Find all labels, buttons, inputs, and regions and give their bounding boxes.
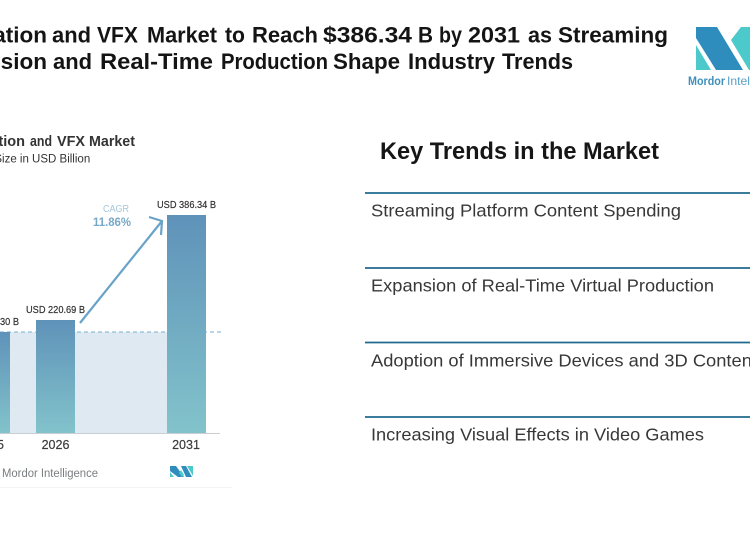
title: $386.34: [323, 22, 412, 48]
title: B: [418, 22, 433, 48]
title: by: [439, 22, 462, 48]
title: Reach: [252, 22, 318, 48]
bar value labels: [0, 199, 216, 328]
logo: Mordor Intelligence: Intel: [727, 74, 750, 88]
chart heading: and: [30, 134, 52, 150]
CAGR label: CAGR: [103, 204, 129, 215]
title: Trends: [502, 49, 573, 74]
trend 1: Streaming Platform Content Spending: [371, 200, 681, 220]
trend 4: Increasing Visual Effects in Video Games: [371, 424, 704, 444]
bar value labels: USD 386.34 B: [157, 199, 216, 211]
title: and: [52, 22, 91, 48]
heading: key trends: Key Trends in the Market: [380, 138, 659, 165]
year labels: 2026: [42, 438, 69, 452]
bar value labels: USD 220.69 B: [26, 304, 85, 316]
axis: [0, 432, 220, 434]
title: Streaming: [558, 22, 668, 48]
bar 2026: [36, 320, 75, 433]
small logo: [170, 466, 193, 477]
panel: market size chart: [0, 134, 232, 488]
title: Production: [221, 49, 328, 74]
chart heading: VFX: [57, 134, 85, 150]
CAGR label: [93, 204, 131, 229]
title: Industry: [408, 49, 495, 74]
shaded baseline area: [0, 332, 167, 433]
title: Real-Time: [100, 49, 213, 74]
year labels: 2031: [172, 438, 200, 452]
bar 2031: [167, 215, 206, 433]
year labels: [0, 438, 200, 452]
CAGR arrow: [80, 217, 162, 323]
title: [0, 22, 668, 74]
logo: Mordor Intelligence: Mordor: [688, 74, 725, 88]
title: and: [53, 49, 92, 74]
dashed reference line: [0, 331, 221, 333]
trend 2: Expansion of Real-Time Virtual Production: [371, 276, 714, 296]
title: Shape: [333, 49, 400, 74]
title: to: [225, 22, 245, 48]
title: 2031: [468, 22, 520, 48]
trend 3: Adoption of Immersive Devices and 3D Content: [371, 350, 750, 370]
chart source: Mordor Intelligence: [2, 468, 98, 480]
chart heading: [0, 134, 135, 166]
panel: trends list: [365, 193, 750, 444]
logo: Mordor Intelligence: [688, 27, 750, 88]
title: Market: [147, 22, 217, 48]
CAGR label: 11.86%: [93, 215, 131, 229]
chart heading: Market: [89, 134, 135, 150]
title: as: [528, 22, 552, 48]
title: VFX: [97, 22, 138, 48]
bar 2025: [0, 332, 10, 433]
